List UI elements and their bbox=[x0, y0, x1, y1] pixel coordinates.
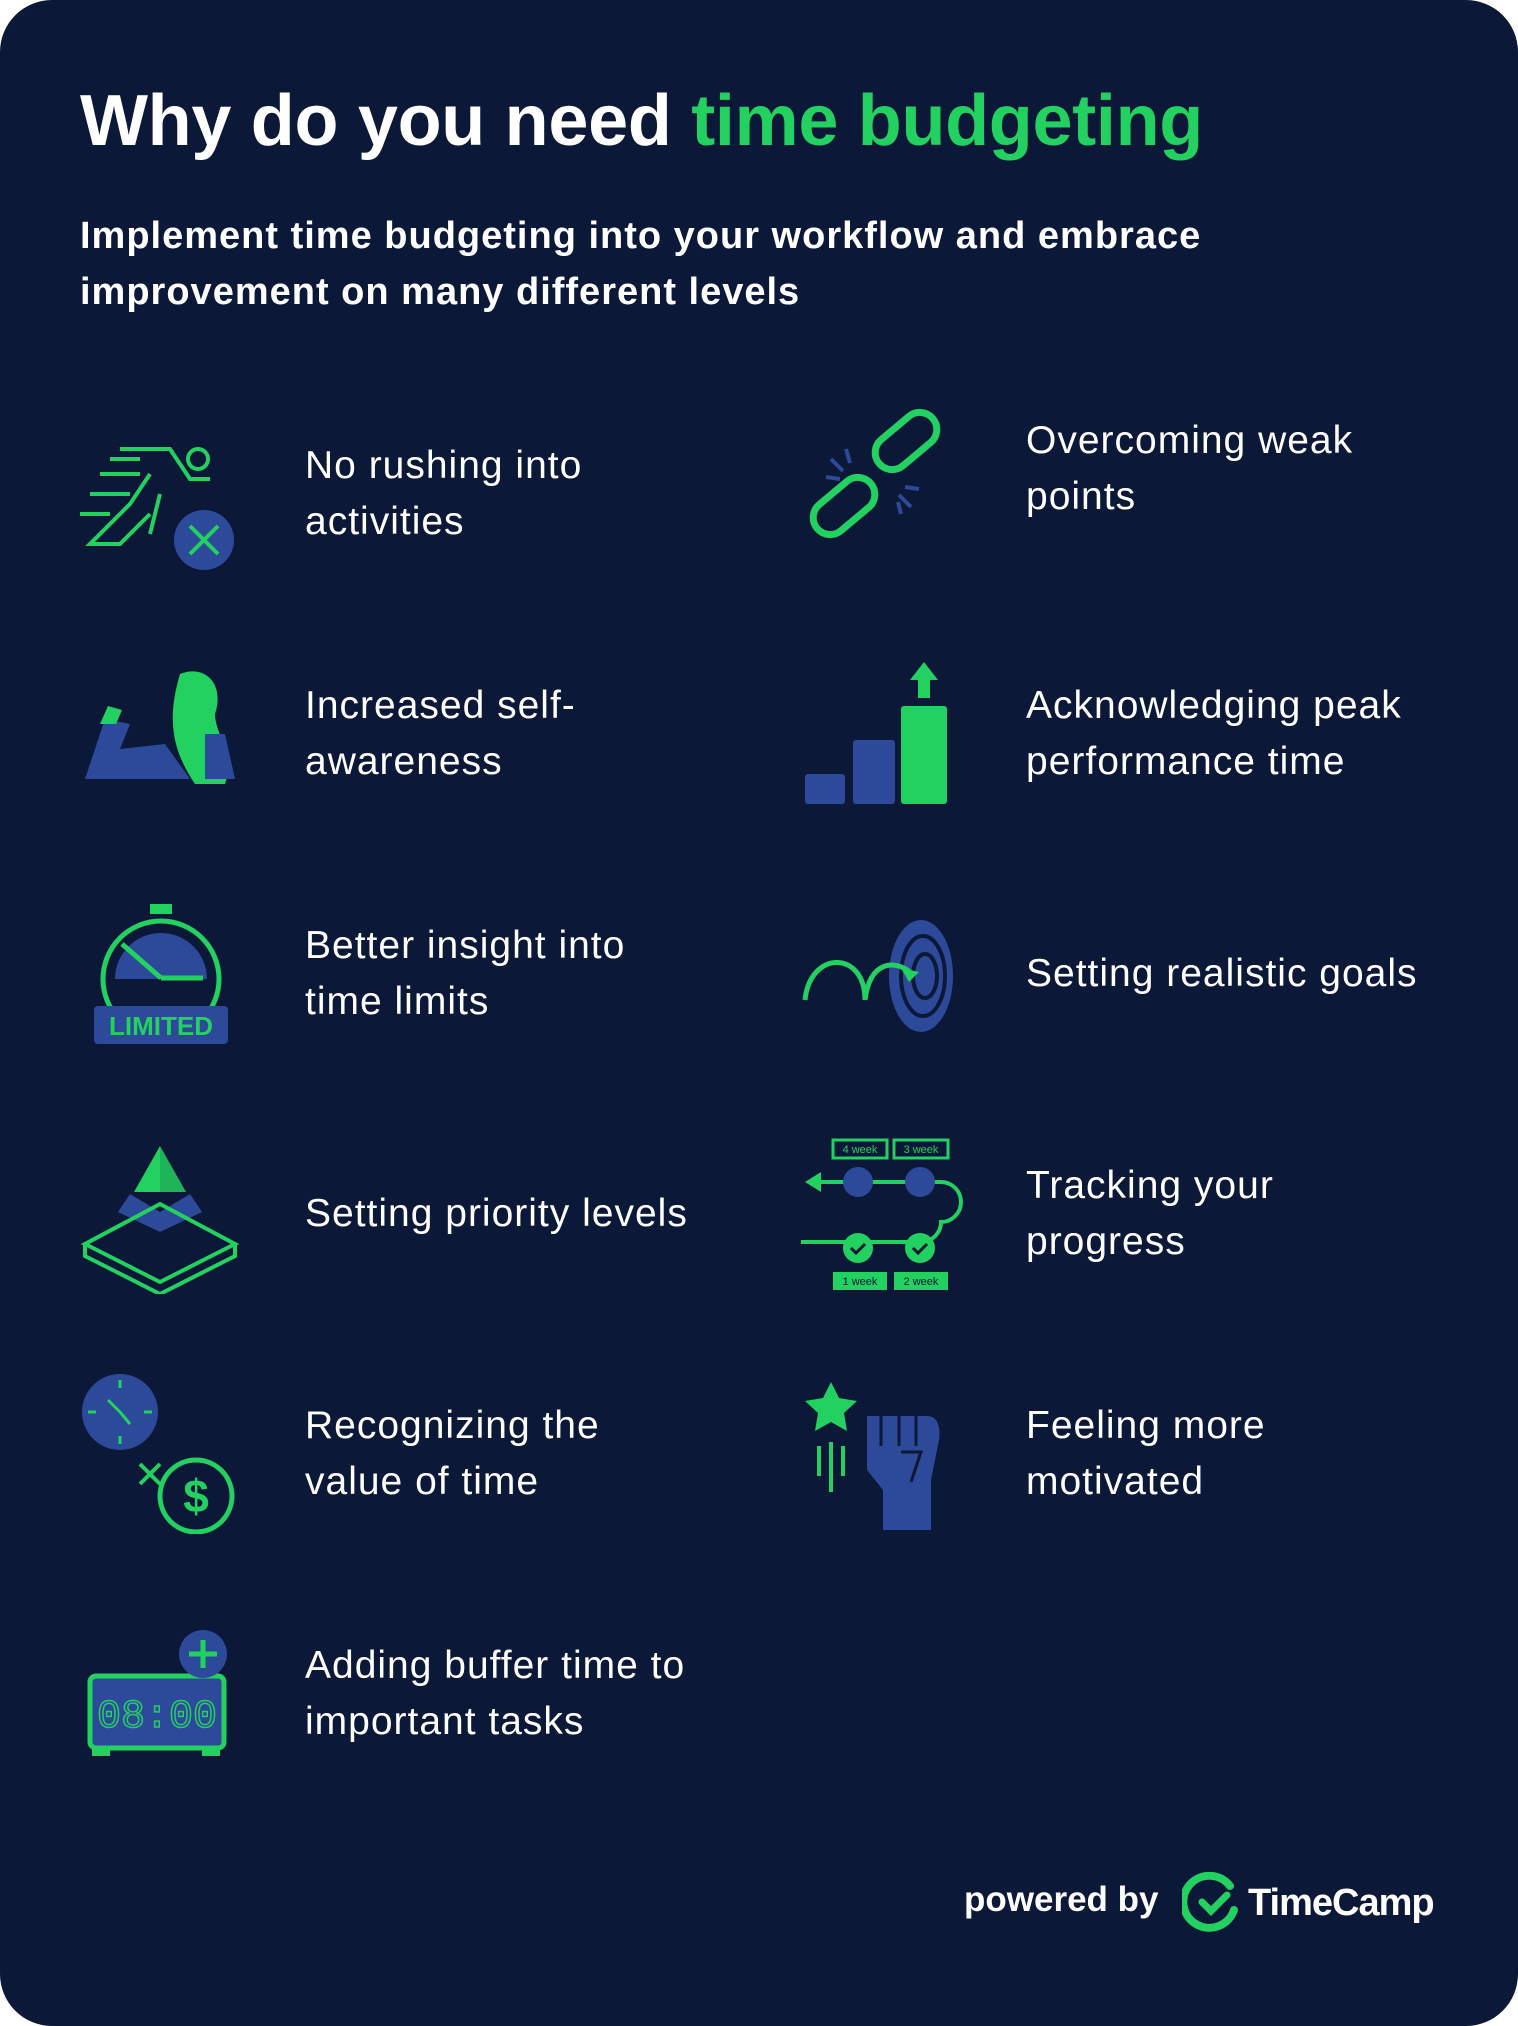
icon: clock and dollar: $ bbox=[183, 1470, 209, 1522]
item: buffer time bbox=[88, 1630, 685, 1756]
item: self-awareness: Increased self- bbox=[305, 684, 576, 727]
item: value of time: value of time bbox=[305, 1460, 539, 1503]
icon: digital clock plus: 08:00 bbox=[97, 1695, 217, 1740]
item: self-awareness bbox=[85, 671, 576, 784]
icon: timeline: 2 week bbox=[904, 1276, 939, 1288]
icon: pyramid bbox=[80, 1146, 240, 1294]
icon: clock and dollar bbox=[82, 1374, 234, 1534]
item: time limits: Better insight into bbox=[305, 924, 625, 967]
item: no rushing: activities bbox=[305, 500, 465, 543]
logo: TimeCamp: TimeCamp bbox=[1248, 1882, 1434, 1924]
subtitle: improvement on many different levels bbox=[80, 271, 800, 313]
item: value of time bbox=[82, 1374, 600, 1534]
icon: timeline: 4 week bbox=[843, 1144, 878, 1156]
item: tracking progress bbox=[801, 1138, 1274, 1290]
icon: bar chart bbox=[805, 662, 947, 804]
icon: timeline bbox=[801, 1138, 963, 1290]
item: overcoming weak points: points bbox=[1026, 475, 1136, 518]
icon: timeline: 1 week bbox=[843, 1276, 878, 1288]
item: overcoming weak points bbox=[810, 408, 1353, 538]
item: overcoming weak points: Overcoming weak bbox=[1026, 419, 1353, 462]
item: no rushing: No rushing into bbox=[305, 444, 582, 487]
logo: TimeCamp bbox=[1182, 1872, 1434, 1932]
item: buffer time: Adding buffer time to bbox=[305, 1644, 685, 1687]
icon: target arc bbox=[802, 920, 953, 1032]
subtitle: Implement time budgeting into your workflow and embrace bbox=[80, 215, 1201, 257]
item: realistic goals bbox=[802, 920, 1418, 1032]
icon: fist and star bbox=[805, 1382, 940, 1530]
item: motivated bbox=[805, 1382, 1266, 1530]
icon: broken chain bbox=[810, 408, 940, 538]
icon: stopwatch limited: LIMITED bbox=[109, 1011, 213, 1041]
icon: digital clock plus bbox=[88, 1630, 227, 1756]
item: motivated: motivated bbox=[1026, 1460, 1204, 1503]
icon: runner with x bbox=[80, 447, 234, 570]
item: priority levels: Setting priority levels bbox=[305, 1192, 688, 1235]
footer: powered by TimeCamp: powered by bbox=[964, 1880, 1158, 1919]
item: priority levels bbox=[80, 1146, 688, 1294]
item: peak performance: performance time bbox=[1026, 740, 1345, 783]
item: time limits bbox=[94, 904, 625, 1044]
icon: stopwatch limited bbox=[94, 904, 228, 1044]
subtitle bbox=[80, 215, 1201, 313]
item: time limits: time limits bbox=[305, 980, 489, 1023]
item: motivated: Feeling more bbox=[1026, 1404, 1266, 1447]
icon: woman flexing bbox=[85, 671, 235, 784]
item: buffer time: important tasks bbox=[305, 1700, 584, 1743]
item: value of time: Recognizing the bbox=[305, 1404, 600, 1447]
footer: powered by TimeCamp bbox=[964, 1872, 1434, 1932]
title: Why do you need time budgeting bbox=[80, 81, 1203, 161]
item: peak performance bbox=[805, 662, 1402, 804]
item: self-awareness: awareness bbox=[305, 740, 503, 783]
item: peak performance: Acknowledging peak bbox=[1026, 684, 1402, 727]
icon: timeline: 3 week bbox=[904, 1144, 939, 1156]
item: tracking progress: progress bbox=[1026, 1220, 1186, 1263]
item: no rushing bbox=[80, 444, 582, 570]
item: tracking progress: Tracking your bbox=[1026, 1164, 1274, 1207]
item: realistic goals: Setting realistic goals bbox=[1026, 952, 1418, 995]
